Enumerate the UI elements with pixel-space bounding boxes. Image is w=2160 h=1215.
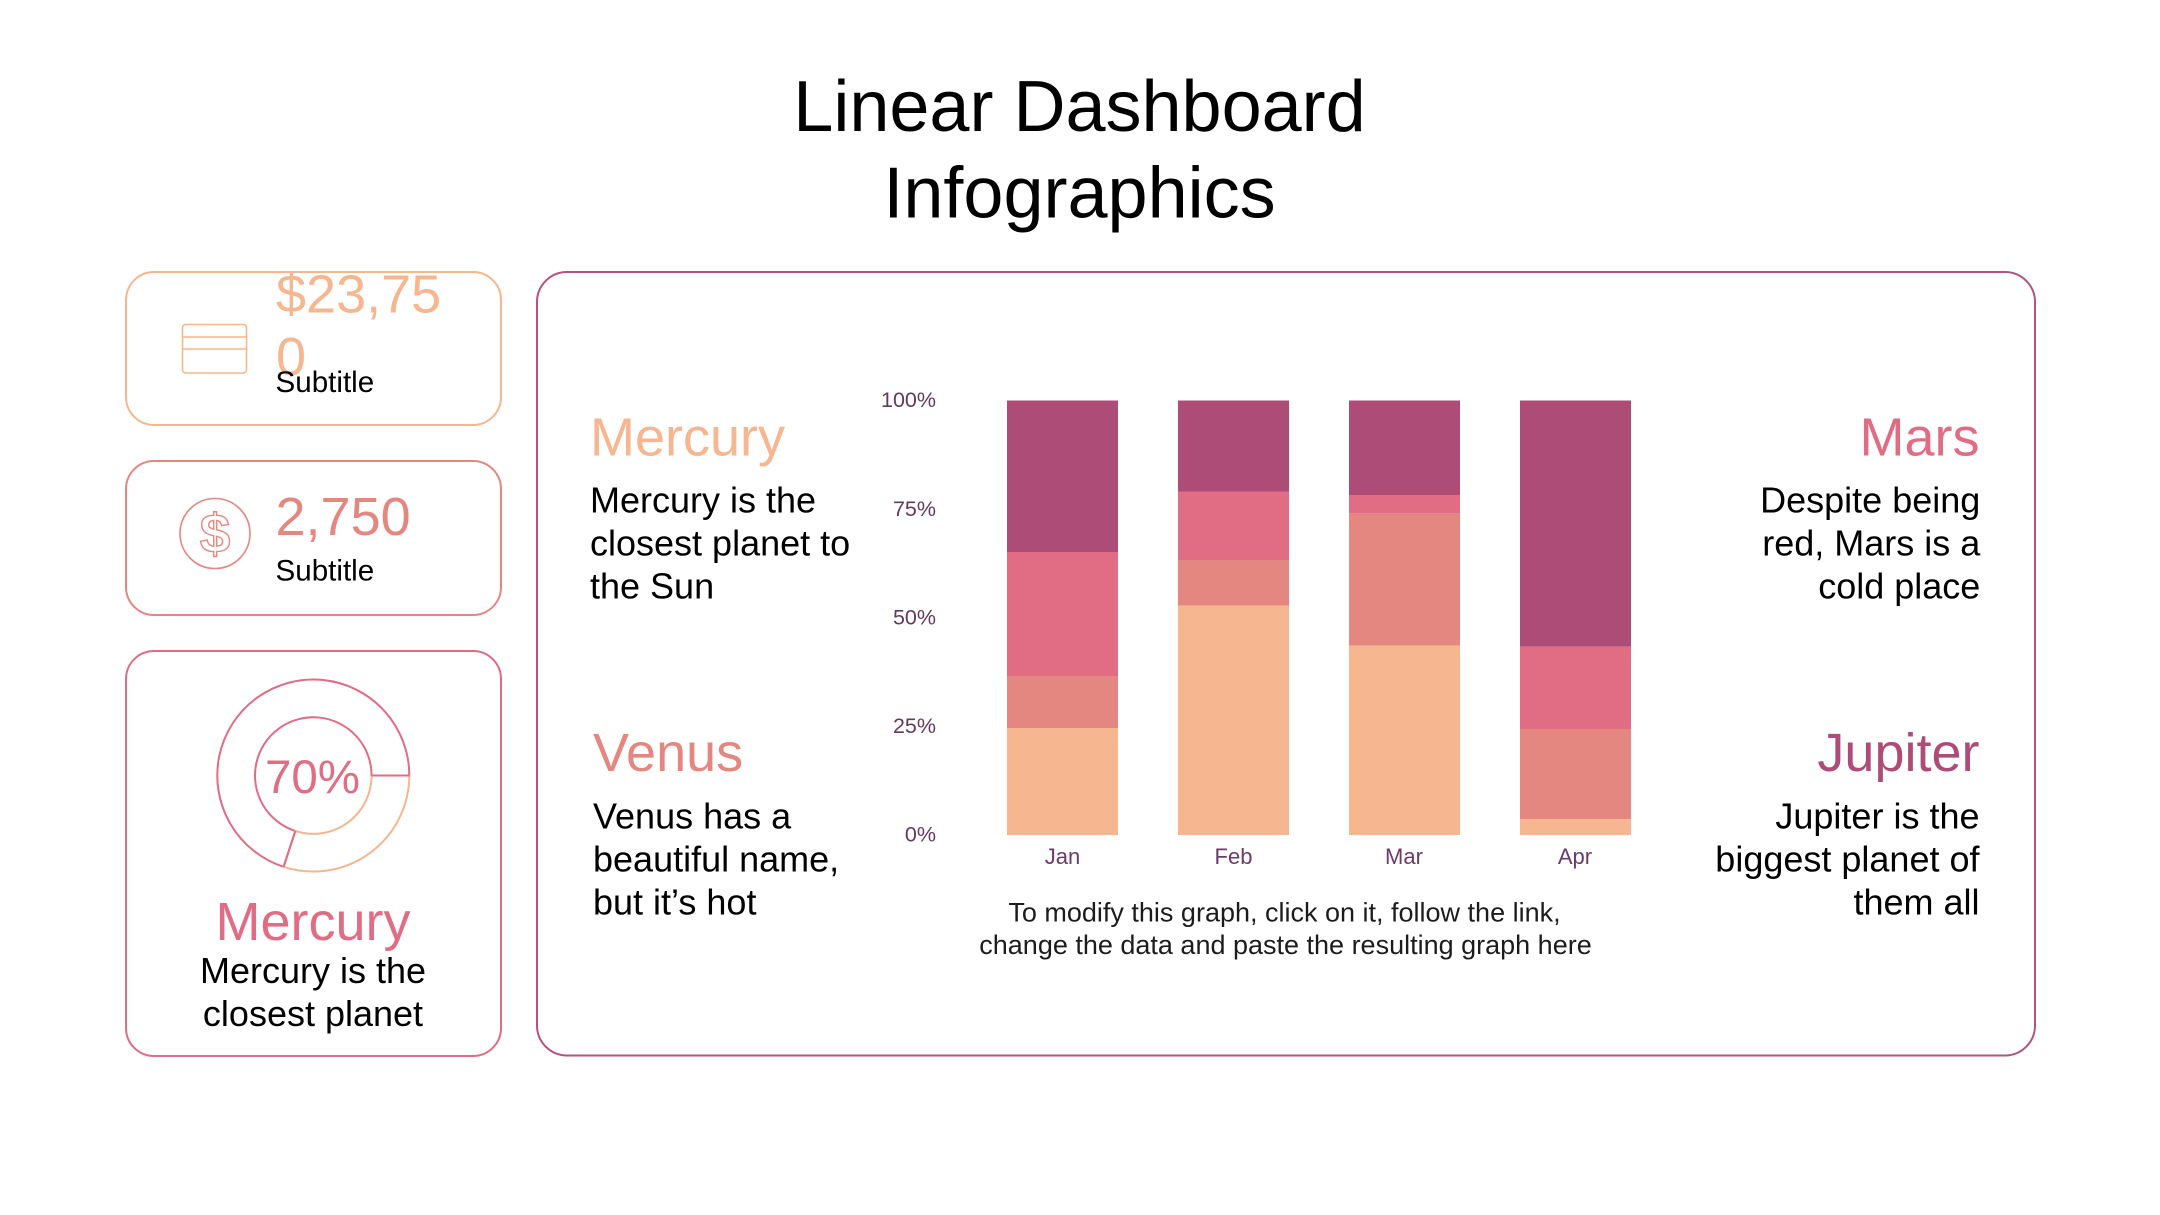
bar chart: stacked percentages: [881, 388, 1631, 869]
donut description: [200, 950, 426, 1034]
donut description: closest planet: [203, 993, 423, 1034]
subtitle: balance: Subtitle: [276, 366, 374, 399]
text block: Mercury: the Sun: [590, 566, 714, 607]
text block: Venus: Venus has a: [593, 796, 792, 836]
text block: Mercury: [590, 408, 850, 607]
text block: Jupiter: Jupiter is the: [1775, 796, 1980, 836]
panel: donut card: [126, 651, 501, 1056]
text block: Mars: Mars: [1860, 408, 1980, 468]
donut heading: Mercury: [215, 892, 411, 952]
text block: Jupiter: [1715, 723, 1980, 922]
panel: card dollars: [126, 461, 501, 615]
x axis labels: [1045, 844, 1592, 869]
text block: Venus: Venus: [593, 723, 743, 783]
y axis labels: 25%: [893, 714, 936, 738]
donut description: Mercury is the: [200, 950, 426, 991]
text block: Mars: cold place: [1818, 566, 1980, 607]
x axis labels: Jan: [1045, 844, 1080, 869]
bar: Feb: [1178, 400, 1289, 835]
x axis labels: Apr: [1558, 844, 1592, 869]
text block: Jupiter: them all: [1853, 882, 1980, 922]
stat value: balance: $23,75: [276, 264, 441, 324]
text block: Venus: [593, 723, 839, 922]
stat value: dollars: 2,750: [276, 487, 411, 547]
y axis labels: 0%: [905, 822, 936, 846]
bar: Jan: [1007, 400, 1118, 835]
title: [793, 67, 1366, 234]
chart note: change the data and paste the resulting graph here: [979, 930, 1592, 960]
bar: Mar: [1349, 400, 1460, 835]
y axis labels: 100%: [881, 388, 936, 412]
text block: Venus: but it’s hot: [593, 882, 756, 922]
text block: Mercury: Mercury: [590, 408, 785, 468]
subtitle: dollars: Subtitle: [276, 554, 374, 588]
text block: Jupiter: biggest planet of: [1715, 838, 1980, 880]
text block: Venus: beautiful name,: [593, 838, 839, 880]
icon: credit card: [182, 324, 246, 373]
icon: dollar coin: $: [200, 502, 230, 564]
y axis labels: [881, 388, 936, 846]
bar: Apr: [1520, 400, 1631, 835]
chart note: To modify this graph, click on it, follow the link,: [1008, 898, 1561, 928]
text block: Mars: Despite being: [1760, 480, 1980, 521]
title: Linear Dashboard: [793, 67, 1366, 147]
panel: card balance: [126, 264, 501, 425]
text block: Mars: [1760, 408, 1981, 607]
text block: Jupiter: Jupiter: [1817, 723, 1980, 783]
donut chart 70%: [217, 680, 409, 872]
x axis labels: Feb: [1215, 844, 1252, 869]
text block: Mars: red, Mars is a: [1762, 523, 1981, 564]
text block: Mercury: Mercury is the: [590, 480, 816, 521]
donut value: 70%: [265, 751, 360, 804]
stat value: balance: 0: [276, 327, 306, 387]
y axis labels: 50%: [893, 606, 936, 630]
y axis labels: 75%: [893, 497, 936, 521]
panel: main chart panel: [537, 272, 2035, 1056]
chart note: [979, 898, 1592, 960]
x axis labels: Mar: [1385, 844, 1423, 869]
icon: dollar coin: [180, 498, 250, 568]
stat value: balance: [276, 264, 441, 387]
title: Infographics: [883, 154, 1276, 234]
text block: Mercury: closest planet to: [590, 523, 850, 564]
